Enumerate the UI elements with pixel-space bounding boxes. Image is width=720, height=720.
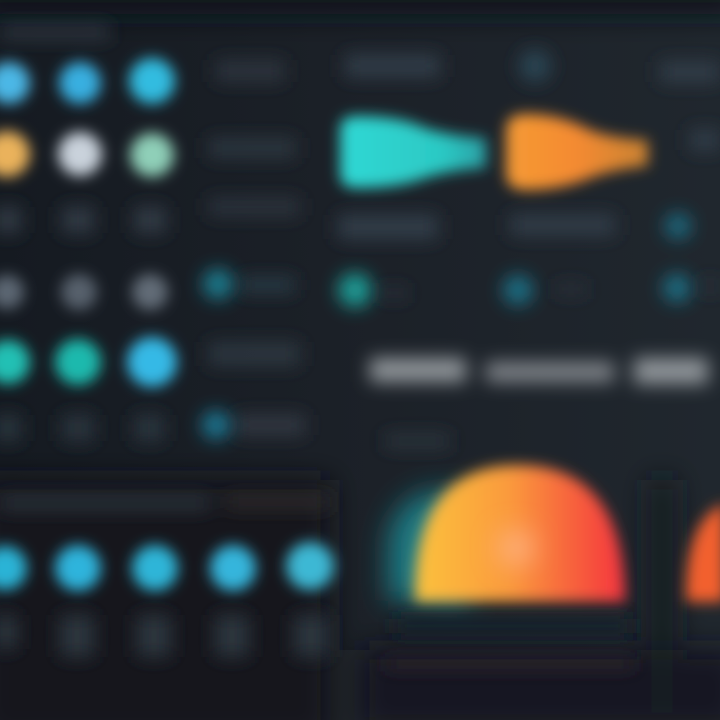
icon row: teal circles [0,337,177,387]
icon row: blue circles [0,58,175,104]
icon row: pastel circles [0,131,174,177]
icon: small teal dots [202,50,691,439]
panel: upper right labels [338,55,720,298]
icon row: bottom blue circles [0,542,334,591]
chart: orange bar [506,114,648,190]
label: above dome [385,435,450,447]
heading: top left [0,26,110,38]
dome base shadow [395,618,630,634]
dome shape [415,465,625,602]
text row: under teal circles [0,415,164,441]
chart: teal bar [340,116,486,188]
shadow: teal behind dome [388,492,470,606]
text row: bottom labels [0,615,328,657]
heading: lower right title [370,358,708,384]
heading: bottom row [0,497,330,509]
chart: second dome cropped [686,503,720,602]
panel: circle grid [0,58,177,441]
chart: dome [385,465,635,668]
panel: bottom circles row [0,497,334,657]
dome bottom strip [385,660,635,668]
text row: under pastel circles [0,207,166,233]
panel: middle text column [208,60,305,435]
icon row: grey circles [0,274,168,310]
highlight [500,532,532,564]
